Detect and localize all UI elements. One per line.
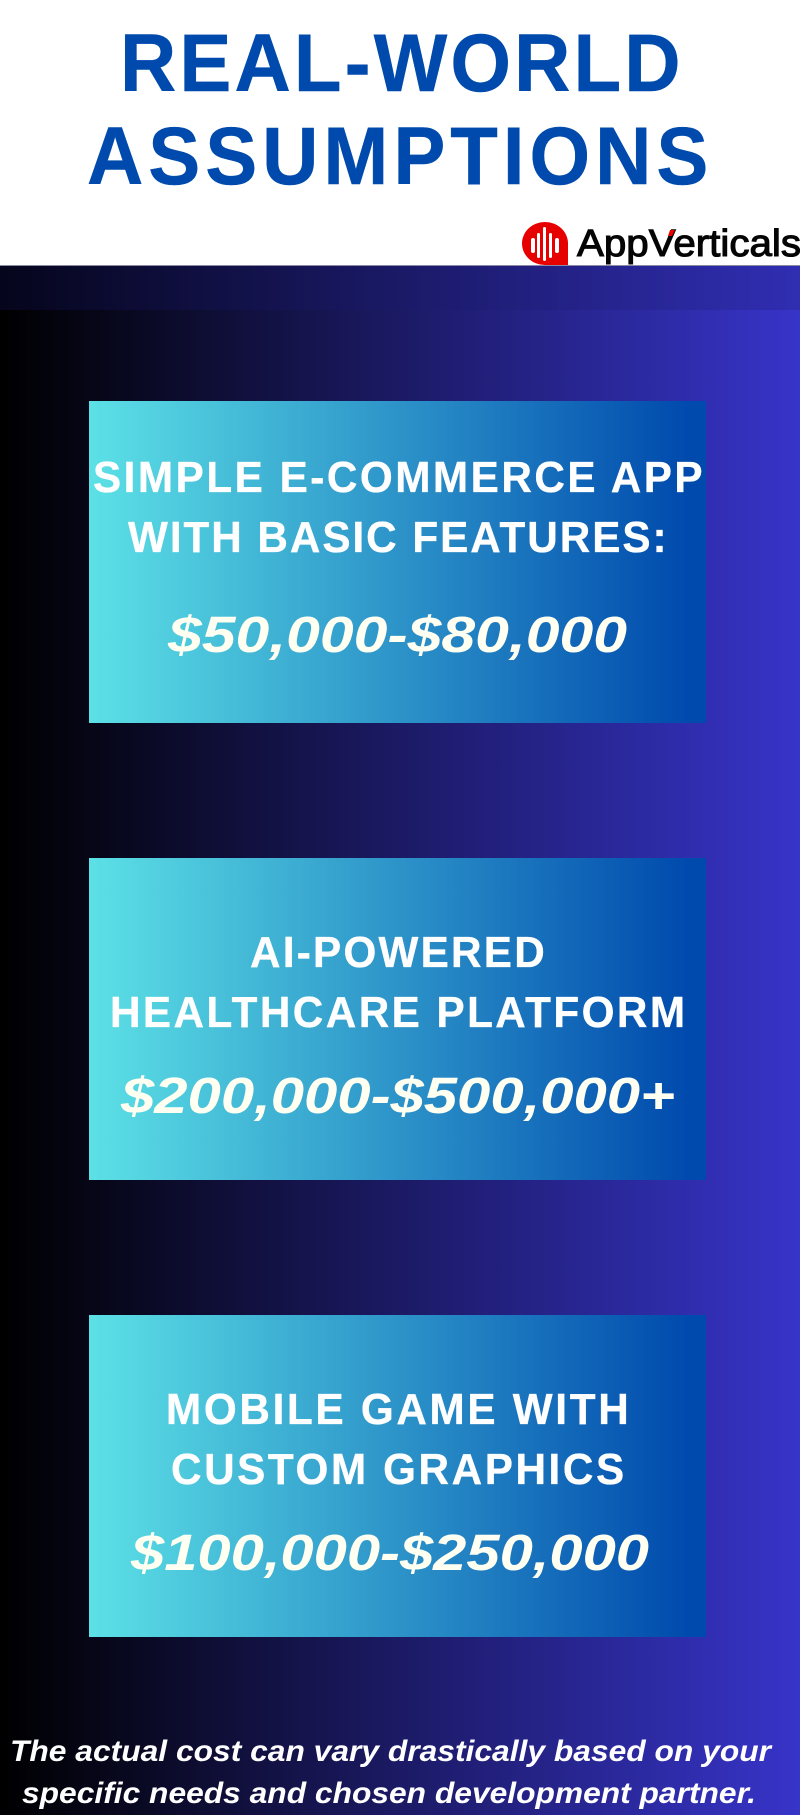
footer note [10, 1735, 773, 1810]
footer note: The actual cost can vary drastically based on your [10, 1735, 773, 1768]
icon: red pin [522, 222, 568, 265]
heading: MOBILE GAME WITH [166, 1385, 629, 1434]
panel: AI-powered healthcare platform [89, 858, 706, 1180]
heading: WITH BASIC FEATURES: [128, 513, 667, 562]
header background [0, 0, 800, 265]
logo: AppVerticals [522, 222, 800, 265]
panel: simple e-commerce app [89, 401, 706, 723]
heading [110, 928, 685, 1037]
gradient band under header [0, 265, 800, 310]
title: REAL-WORLD [120, 17, 681, 108]
price: $100,000-$250,000 [130, 1524, 649, 1581]
title: ASSUMPTIONS [87, 110, 708, 201]
title [87, 17, 708, 201]
heading [166, 1385, 629, 1494]
heading [93, 453, 703, 562]
heading: SIMPLE E-COMMERCE APP [93, 453, 703, 502]
panel: mobile game with custom graphics [89, 1315, 706, 1637]
logo wordmark: AppVerticals [577, 223, 800, 265]
heading: CUSTOM GRAPHICS [171, 1445, 624, 1494]
heading: HEALTHCARE PLATFORM [110, 988, 685, 1037]
price: $200,000-$500,000+ [120, 1067, 675, 1124]
heading: AI-POWERED [250, 928, 545, 977]
price: $50,000-$80,000 [167, 606, 627, 663]
footer note: specific needs and chosen development partner. [22, 1777, 756, 1810]
